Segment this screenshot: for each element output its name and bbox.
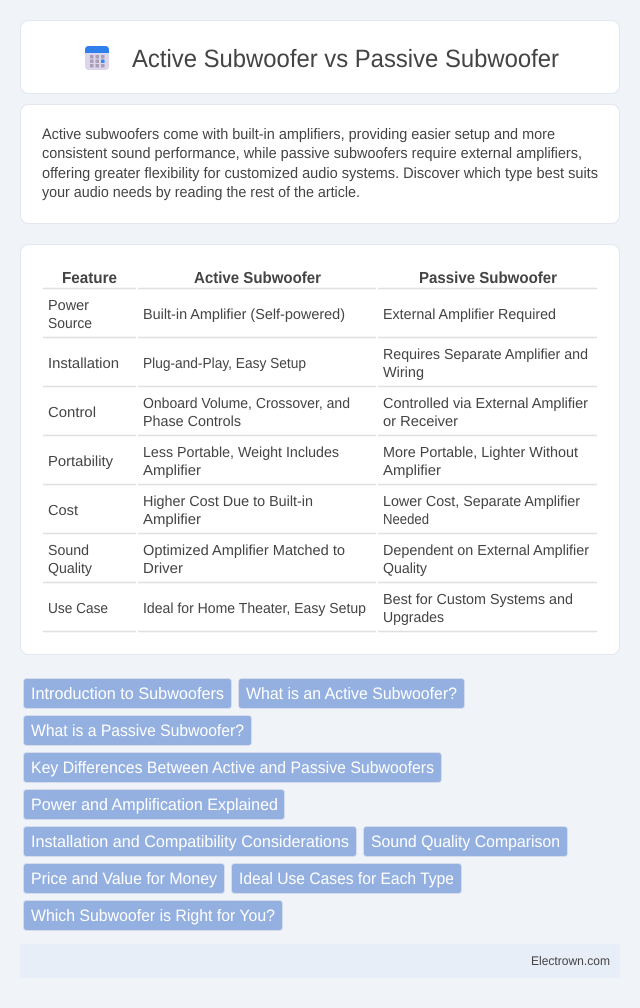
row: portability: More Portable, Lighter Without	[383, 445, 578, 461]
panel: introduction	[20, 104, 620, 224]
table header	[62, 270, 557, 287]
intro text	[42, 126, 598, 201]
row: portability: Amplifier	[143, 463, 201, 479]
table header: Passive Subwoofer	[419, 270, 557, 287]
row: cost: Needed	[383, 512, 429, 528]
row: sound quality: Quality	[383, 561, 428, 577]
row: installation: Wiring	[383, 365, 424, 381]
footer	[20, 944, 620, 978]
row: sound quality: Quality	[48, 561, 93, 577]
row: use case: Use Case	[48, 601, 108, 617]
row: control	[48, 396, 588, 430]
row: power source: Built-in Amplifier (Self-powered)	[143, 307, 345, 323]
row: cost: Amplifier	[143, 512, 201, 528]
tag: price	[24, 864, 224, 894]
tag: which: Which Subwoofer is Right for You?	[31, 906, 275, 925]
row: control: Control	[48, 405, 96, 421]
table header: Active Subwoofer	[194, 270, 321, 287]
row: cost: Cost	[48, 503, 78, 519]
row: power source: Power	[48, 298, 89, 314]
row: installation: Installation	[48, 356, 119, 372]
row: sound quality: Optimized Amplifier Matched to	[143, 543, 345, 559]
tag: passive	[24, 716, 252, 746]
row: sound quality: Driver	[143, 561, 183, 577]
row: use case: Upgrades	[383, 610, 444, 626]
row: cost: Lower Cost, Separate Amplifier	[383, 494, 580, 510]
tag: sound quality	[364, 826, 568, 856]
row: sound quality	[48, 543, 589, 577]
row: portability: Less Portable, Weight Includes	[143, 445, 339, 461]
tag: installation: Installation and Compatibility Considerations	[31, 832, 349, 851]
row: sound quality: Sound	[48, 543, 89, 559]
icon: calendar	[85, 46, 109, 70]
row: control: Onboard Volume, Crossover, and	[143, 396, 350, 412]
title: Active Subwoofer vs Passive Subwoofer	[132, 45, 559, 73]
tag: use cases: Ideal Use Cases for Each Type	[239, 869, 454, 888]
row: control: or Receiver	[383, 414, 458, 430]
tag: which	[24, 900, 282, 930]
panel: title header	[20, 20, 620, 94]
tag: key differences	[24, 752, 442, 782]
row: installation	[48, 347, 588, 381]
row: portability: Portability	[48, 454, 114, 470]
tag: sound quality: Sound Quality Comparison	[371, 832, 560, 851]
tag: power	[24, 790, 284, 820]
row: power source	[48, 298, 556, 332]
row: power source: Source	[48, 316, 92, 332]
footer: Electrown.com	[531, 954, 610, 968]
intro text: offering greater flexibility for customized audio systems. Discover which type best suits	[42, 165, 598, 182]
tag: key differences: Key Differences Between Active and Passive Subwoofers	[31, 758, 434, 777]
intro text: your audio needs by reading the rest of the article.	[42, 184, 360, 201]
row: installation: Plug-and-Play, Easy Setup	[143, 356, 306, 372]
tag: passive: What is a Passive Subwoofer?	[31, 721, 244, 740]
intro text: Active subwoofers come with built-in amplifiers, providing easier setup and more	[42, 126, 555, 143]
row: cost	[48, 494, 580, 528]
panel: comparison table	[20, 244, 620, 654]
tag: price: Price and Value for Money	[31, 869, 218, 888]
tag: power: Power and Amplification Explained	[31, 795, 278, 814]
row: use case: Best for Custom Systems and	[383, 592, 573, 608]
row: installation: Requires Separate Amplifier and	[383, 347, 588, 363]
row: portability: Amplifier	[383, 463, 441, 479]
row: use case	[48, 592, 573, 626]
row: control: Controlled via External Amplifier	[383, 396, 588, 412]
intro text: consistent sound performance, while passive subwoofers require external amplifiers,	[42, 145, 582, 162]
tag: active: What is an Active Subwoofer?	[246, 684, 457, 703]
row: portability	[48, 445, 578, 479]
row: cost: Higher Cost Due to Built-in	[143, 494, 313, 510]
row: sound quality: Dependent on External Amplifier	[383, 543, 589, 559]
tag: introduction	[24, 678, 232, 708]
tag: installation	[24, 826, 356, 856]
row: control: Phase Controls	[143, 414, 241, 430]
topic tags	[24, 678, 568, 930]
row: use case: Ideal for Home Theater, Easy Setup	[143, 601, 366, 617]
tag: introduction: Introduction to Subwoofers	[31, 684, 224, 703]
row: power source: External Amplifier Required	[383, 307, 556, 323]
table header: Feature	[62, 270, 117, 287]
tag: use cases	[232, 864, 462, 894]
tag: active	[238, 678, 464, 708]
